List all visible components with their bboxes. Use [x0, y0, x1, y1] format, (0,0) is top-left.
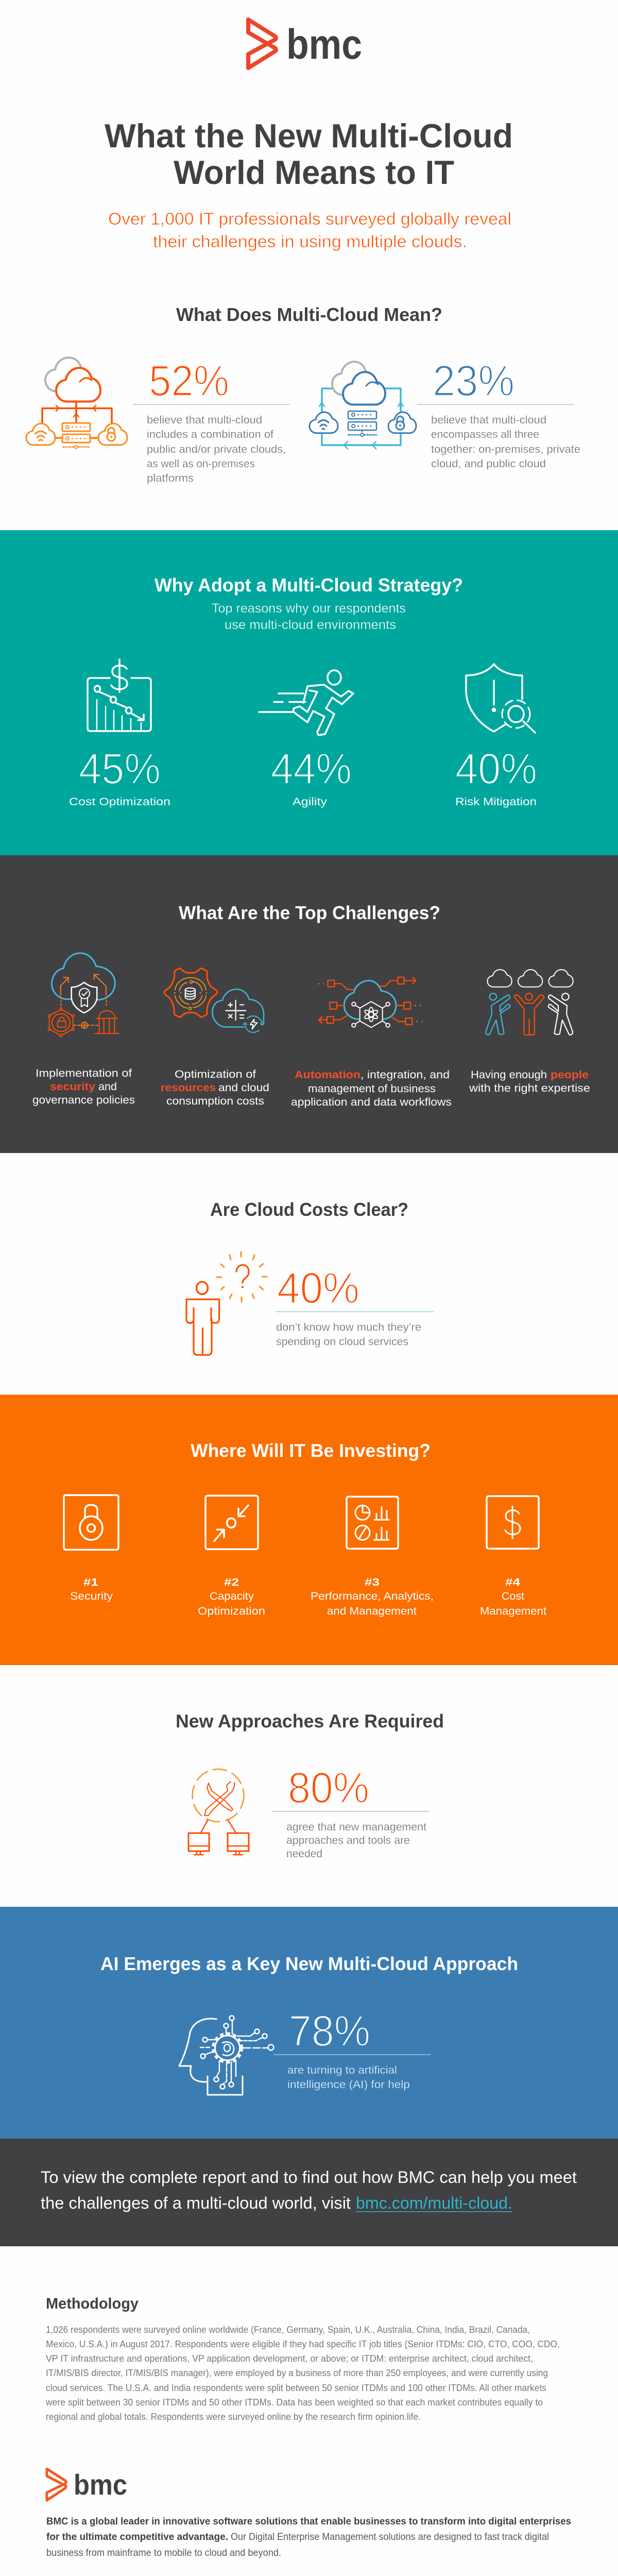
text: #1 security: Security — [70, 1590, 113, 1602]
text: people challenge: with the right expertise — [469, 1082, 590, 1094]
text: automation challenge: Automation — [295, 1069, 360, 1081]
icon: orange cloud network — [26, 358, 127, 448]
text: 23% description — [431, 414, 580, 470]
heading: AI emerges: AI Emerges as a Key New Multi-Cloud Approach — [100, 1953, 518, 1974]
text: 23% description: together: on-premises, private — [431, 444, 580, 455]
text: resources challenge: Optimization of — [175, 1069, 256, 1080]
icon: analytics charts in box — [347, 1497, 398, 1549]
icon: shield with magnifier — [466, 664, 535, 733]
text: 80% description: needed — [286, 1848, 322, 1860]
text: resources challenge: and cloud — [218, 1082, 269, 1094]
text: people challenge — [469, 1069, 590, 1094]
text: 78% description: intelligence (AI) for help — [287, 2079, 410, 2091]
text: 23% description: cloud, and public cloud — [431, 458, 546, 470]
divider: 78% — [274, 2054, 431, 2055]
icon: people and clouds — [486, 970, 573, 1035]
icon: tools and monitors — [188, 1769, 249, 1855]
text: security challenge: Implementation of — [36, 1067, 132, 1079]
text: 80% description: agree that new management — [286, 1821, 426, 1833]
stat: 78%: 78% — [289, 2007, 370, 2055]
text: resources challenge: resources — [161, 1082, 216, 1094]
stat: 44% agility: 44% — [271, 744, 352, 793]
panel: top challenges — [0, 855, 618, 1153]
text: security challenge: security — [50, 1081, 95, 1093]
heading: are cloud costs clear: Are Cloud Costs Clear? — [210, 1199, 408, 1220]
text: #3 performance: #3 — [365, 1577, 380, 1588]
text: #2 capacity optimization — [198, 1577, 265, 1617]
heading: methodology: Methodology — [46, 2295, 139, 2312]
icon: blue cloud network — [310, 362, 416, 449]
text: top reasons — [212, 601, 406, 632]
text: #4 cost management: Cost — [502, 1590, 524, 1602]
text: #3 performance: and Management — [327, 1605, 417, 1617]
heading: investing: Where Will IT Be Investing? — [191, 1440, 431, 1461]
title: World Means to IT — [174, 154, 454, 191]
text: #2 capacity optimization: Capacity — [210, 1590, 254, 1602]
text: automation challenge: , integration, and — [360, 1069, 450, 1081]
text: automation challenge: management of business — [308, 1083, 436, 1095]
text: methodology body: VP IT infrastructure and operations, VP application development, or above; or ITDM: enterprise architect, cloud architect, — [46, 2353, 533, 2364]
header: BMC logo — [248, 20, 362, 68]
heading: top challenges: What Are the Top Challenges? — [179, 902, 440, 923]
icon: gear and cloud calculator — [164, 968, 264, 1032]
text: view the complete report: To view the complete report and to find out how BMC can help you meet — [41, 2168, 577, 2187]
heading: what does multi-cloud mean: What Does Multi-Cloud Mean? — [176, 304, 442, 325]
text: about BMC — [46, 2516, 571, 2558]
icon: cost chart with dollar — [88, 659, 151, 731]
footer logo wordmark: bmc — [74, 2468, 127, 2501]
icon: dollar in box — [487, 1496, 539, 1549]
text: #1 security: #1 — [83, 1577, 98, 1588]
text: view the complete report: the challenges of a multi-cloud world, visit — [41, 2194, 351, 2212]
icon: footer logo mark — [47, 2469, 66, 2500]
link: bmc.com/multi-cloud: bmc.com/multi-cloud. — [356, 2194, 512, 2212]
icon: lock in box — [64, 1495, 118, 1550]
text: methodology body: cloud services. The U.S.A. and India respondents were split between 50 senior ITDMs and 100 other ITDMs. All other markets — [46, 2382, 546, 2393]
text: methodology body — [45, 2324, 560, 2422]
heading: why adopt: Why Adopt a Multi-Cloud Strategy? — [154, 574, 463, 596]
stat: 40% risk mitigation: Risk Mitigation — [455, 796, 537, 808]
text: #4 cost management — [480, 1577, 546, 1617]
text: 52% description: as well as on-premises — [147, 458, 255, 470]
text: #3 performance: Performance, Analytics, — [311, 1590, 434, 1602]
text: methodology body: Mexico, U.S.A.) in August 2017. Respondents were eligible if they had specific IT job titles (Senior ITDMs: CIO, CTO, COO, CDO, — [46, 2338, 560, 2349]
text: 40% description: don’t know how much they’re — [276, 1321, 421, 1333]
text: security challenge: governance policies — [32, 1094, 135, 1106]
text: #1 security — [70, 1577, 113, 1602]
divider: 40% — [276, 1311, 434, 1312]
text: security challenge: and — [98, 1081, 117, 1093]
text: 80% description — [286, 1821, 426, 1860]
text: security challenge — [32, 1067, 135, 1106]
logo wordmark: bmc — [286, 21, 362, 68]
divider: 52% — [133, 404, 290, 405]
stat: 45% cost optimization: Cost Optimization — [69, 796, 170, 808]
text: about BMC: Our Digital Enterprise Management solutions are designed to fast track digital — [231, 2531, 549, 2543]
text: 23% description: believe that multi-cloud — [431, 414, 546, 426]
icon: BMC logo mark — [248, 20, 276, 68]
subtitle: Over 1,000 IT professionals surveyed globally reveal — [108, 209, 511, 228]
stat: 40%: 40% — [277, 1264, 359, 1312]
title: What the New Multi-Cloud — [105, 117, 513, 155]
divider: 23% — [417, 404, 574, 405]
panel: AI emerges — [0, 1907, 618, 2139]
text: methodology body: regional and global totals. Respondents were surveyed online by the research firm opinion.life. — [46, 2411, 421, 2422]
text: people challenge: people — [551, 1069, 589, 1081]
subtitle — [108, 209, 511, 251]
icon: automation cloud hexagon — [318, 977, 425, 1027]
panel: why adopt a multi-cloud strategy — [0, 530, 618, 855]
text: methodology body: 1,026 respondents were surveyed online worldwide (France, Germany, Spain, U.K., Australia, China, India, Brazil, Canada, — [46, 2324, 530, 2335]
divider: 80% — [272, 1811, 429, 1812]
text: 23% description: encompasses all three — [431, 429, 539, 440]
text: 52% description: platforms — [147, 472, 194, 484]
text: about BMC: for the ultimate competitive advantage. — [46, 2531, 228, 2543]
text: resources challenge: consumption costs — [166, 1095, 264, 1107]
text: 40% description — [276, 1321, 421, 1348]
icon: person with question mark — [186, 1252, 267, 1355]
footer: BMC logo — [47, 2468, 127, 2501]
text: 52% description — [147, 414, 286, 484]
text: 52% description: public and/or private clouds, — [147, 444, 286, 455]
text: #4 cost management: Management — [480, 1605, 546, 1617]
text: #2 capacity optimization: #2 — [224, 1577, 239, 1588]
panel: call to action — [0, 2139, 618, 2246]
text: 52% description: includes a combination of — [147, 429, 273, 440]
text: #2 capacity optimization: Optimization — [198, 1605, 265, 1617]
heading: new approaches: New Approaches Are Required — [176, 1710, 444, 1732]
text: methodology body: IT/MIS/BIS director, IT/MIS/BIS manager), were employed by a business of more than 250 employees, and were currently using — [46, 2367, 548, 2378]
title — [105, 117, 513, 191]
text: resources challenge — [161, 1069, 269, 1107]
text: about BMC: business from mainframe to mobile to cloud and beyond. — [46, 2547, 281, 2558]
text: 78% description: are turning to artificial — [287, 2064, 397, 2076]
panel: where will IT be investing — [0, 1395, 618, 1665]
icon: AI head with gear — [179, 2015, 274, 2095]
text: people challenge: Having enough — [471, 1069, 547, 1081]
text: #4 cost management: #4 — [505, 1577, 520, 1588]
icon: running person — [259, 670, 353, 735]
text: top reasons: use multi-cloud environments — [225, 618, 396, 632]
stat: 52%: 52% — [149, 357, 229, 405]
text: top reasons: Top reasons why our respondents — [212, 601, 406, 616]
stat: 45% cost optimization — [69, 744, 170, 808]
text: 80% description: approaches and tools are — [286, 1835, 410, 1846]
text: view the complete report — [41, 2168, 577, 2212]
text: about BMC: BMC is a global leader in innovative software solutions that enable businesses to transform into digital enterprises — [46, 2516, 571, 2527]
text: 40% description: spending on cloud services — [276, 1336, 408, 1348]
icon: security cloud and governance — [48, 953, 119, 1037]
icon: capacity arrows in box — [205, 1496, 258, 1549]
text: 52% description: believe that multi-cloud — [147, 414, 262, 426]
text: automation challenge — [291, 1069, 452, 1108]
text: 78% description — [287, 2064, 410, 2091]
stat: 45% cost optimization: 45% — [79, 744, 161, 793]
stat: 80%: 80% — [288, 1764, 369, 1812]
text: #3 performance — [311, 1577, 434, 1617]
text: methodology body: were split between 30 senior ITDMs and 50 other ITDMs. Data has been weighted so that each market contributes equally to — [45, 2397, 543, 2408]
text: automation challenge: application and data workflows — [291, 1096, 452, 1108]
subtitle: their challenges in using multiple clouds. — [153, 232, 467, 251]
stat: 40% risk mitigation: 40% — [455, 744, 537, 793]
stat: 44% agility: Agility — [293, 796, 328, 808]
stat: 23%: 23% — [433, 357, 514, 405]
